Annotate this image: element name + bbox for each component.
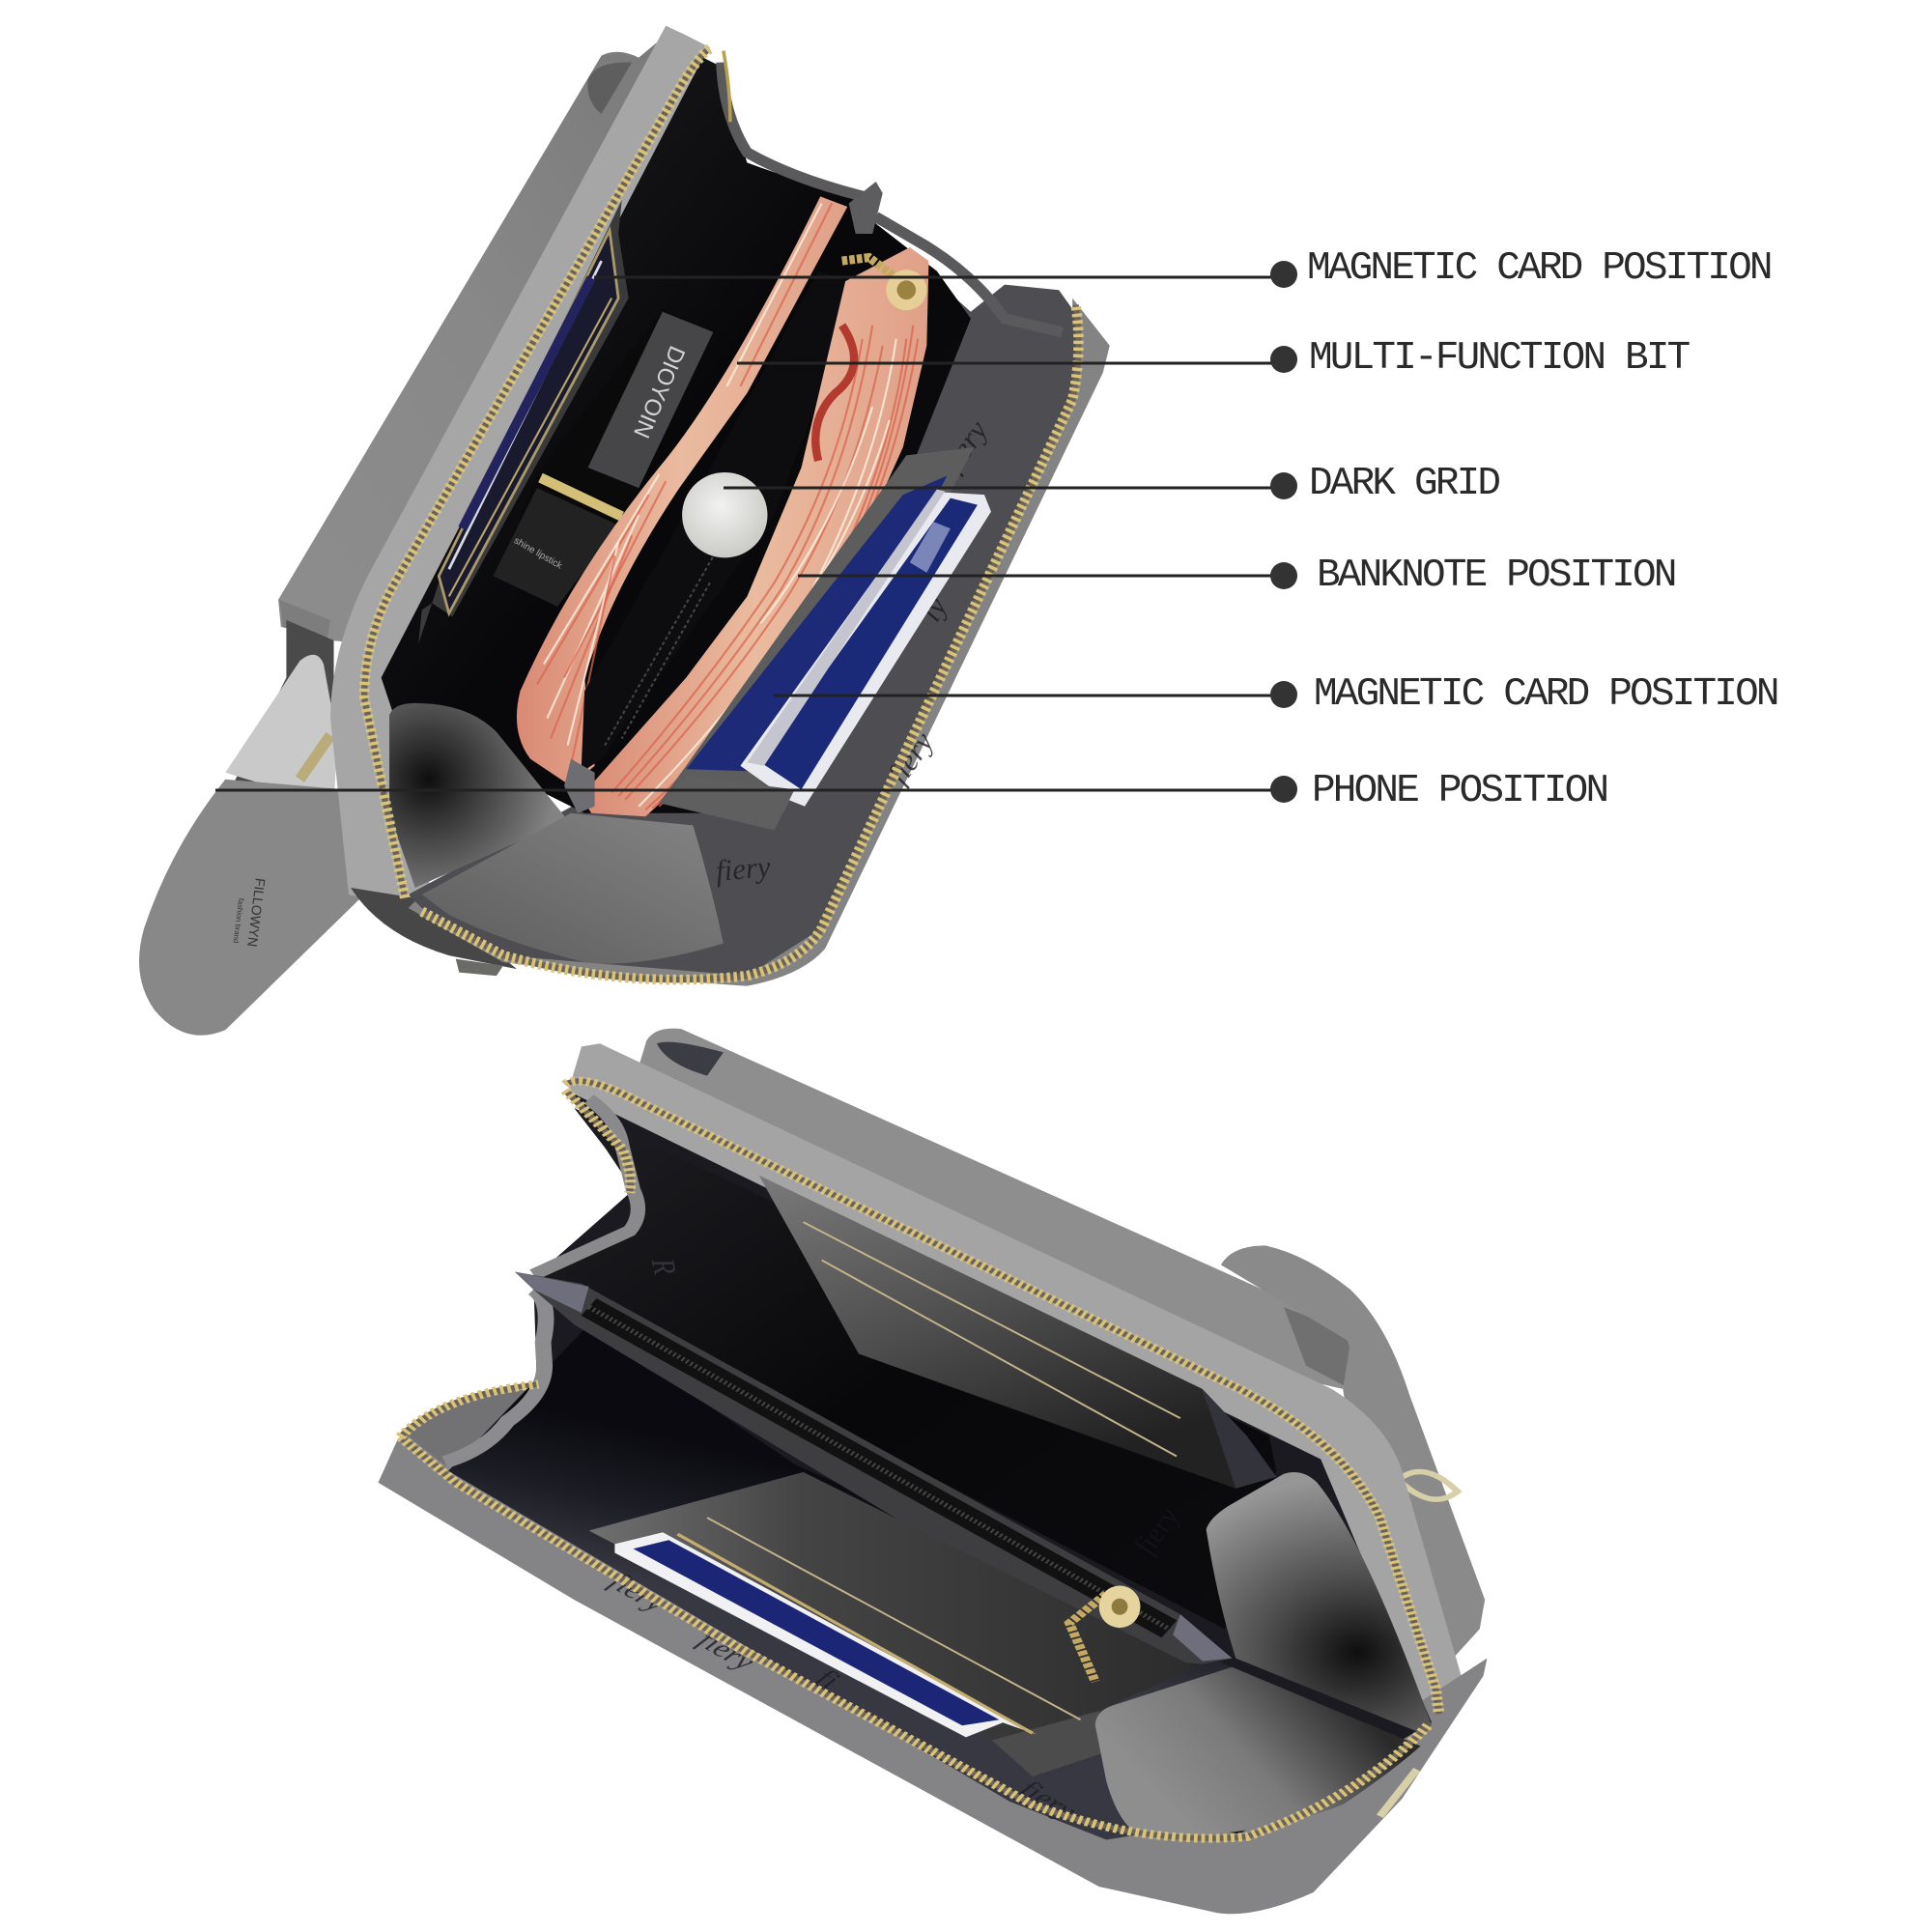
zipper pull (1069, 1585, 1141, 1682)
lower card holder (589, 1472, 1195, 1776)
bottom right flap (422, 813, 724, 964)
lower band (378, 1424, 1487, 1914)
inner band lower left (404, 1389, 545, 1468)
card holder (659, 447, 974, 830)
bottom wallet: open and empty (378, 1029, 1487, 1914)
gusset centre (564, 759, 595, 813)
upper card holder (759, 1176, 1276, 1489)
phone cover flap (1221, 1245, 1485, 1682)
callout: banknote position: BANKNOTE POSITION (1317, 554, 1675, 598)
zip pocket black (582, 271, 849, 773)
zipper band upper (567, 1043, 1462, 1725)
callout: magnetic card position (upper) (594, 246, 1771, 291)
zippers (400, 1081, 1439, 1838)
script lining pattern: fiery (882, 726, 940, 790)
lower lining (448, 1324, 1236, 1839)
callout: magnetic card position (lower): MAGNETIC CARD POSITION (1314, 672, 1777, 717)
tag and lipstick (493, 310, 713, 607)
interior upper black (537, 1108, 1276, 1629)
script lining pattern: fi (810, 1663, 846, 1695)
top wallet: open with contents (139, 26, 1110, 1036)
phone cover flap and strap (139, 620, 364, 1036)
card sleeve left (418, 200, 629, 643)
tag and lipstick: shine lipstick (512, 535, 564, 572)
lower gusset (444, 1290, 546, 1463)
strap ring (299, 735, 330, 780)
callout: multi-function bit: MULTI-FUNCTION BIT (1309, 336, 1690, 381)
script lining pattern (715, 414, 994, 888)
bottom dark edge (351, 888, 517, 969)
script lining pattern: R (644, 1256, 684, 1277)
bottom left flap (389, 703, 568, 888)
gusset edge top (722, 63, 1063, 332)
zippers (364, 49, 1078, 980)
script lining pattern (603, 1256, 1187, 1826)
banknote stack right (582, 247, 928, 816)
script lining pattern: fiery (1013, 1775, 1083, 1826)
script lining pattern: fiery (936, 414, 994, 478)
strap loop (456, 959, 503, 976)
interior base (448, 1091, 1432, 1833)
zip pocket (515, 1272, 1232, 1664)
inner gusset upper (533, 1099, 638, 1275)
gusset tab (849, 182, 883, 234)
coin (682, 472, 767, 557)
side ring (1399, 1472, 1458, 1499)
back pocket panel (634, 1029, 1358, 1389)
lower right flap (1095, 1667, 1421, 1839)
script lining pattern: fiery (1125, 1503, 1187, 1559)
script lining pattern: fiery (603, 1567, 673, 1618)
zipper band left (330, 26, 710, 908)
back pocket panel (278, 41, 693, 643)
callout: phone position (215, 769, 1606, 813)
script lining pattern: fiery (692, 1625, 762, 1676)
tag and lipstick: DIOYOIN (628, 342, 690, 441)
callout: banknote position (798, 554, 1675, 598)
blue card (614, 1532, 1037, 1737)
callout: dark grid (724, 462, 1499, 506)
interior black (382, 58, 971, 813)
right outer band (409, 298, 1110, 986)
banknote stack left (517, 196, 847, 786)
phone cover flap and strap: fashion brand (232, 897, 245, 944)
blue cards (659, 475, 991, 830)
callout: magnetic card position (upper): MAGNETIC CARD POSITION (1307, 246, 1771, 291)
upper right flap (1207, 1472, 1432, 1731)
callout: dark grid: DARK GRID (1309, 462, 1499, 506)
interior lining right (409, 258, 1079, 976)
zipper pull (842, 258, 926, 310)
script lining pattern: ly (914, 591, 953, 627)
callout: multi-function bit (737, 336, 1690, 381)
phone cover flap and strap: FILLOWYN (244, 877, 269, 948)
bottom ring (1379, 1770, 1417, 1816)
callout: magnetic card position (lower) (774, 672, 1777, 717)
script lining pattern: fiery (715, 850, 772, 888)
callout: phone position: PHONE POSITION (1312, 769, 1606, 813)
